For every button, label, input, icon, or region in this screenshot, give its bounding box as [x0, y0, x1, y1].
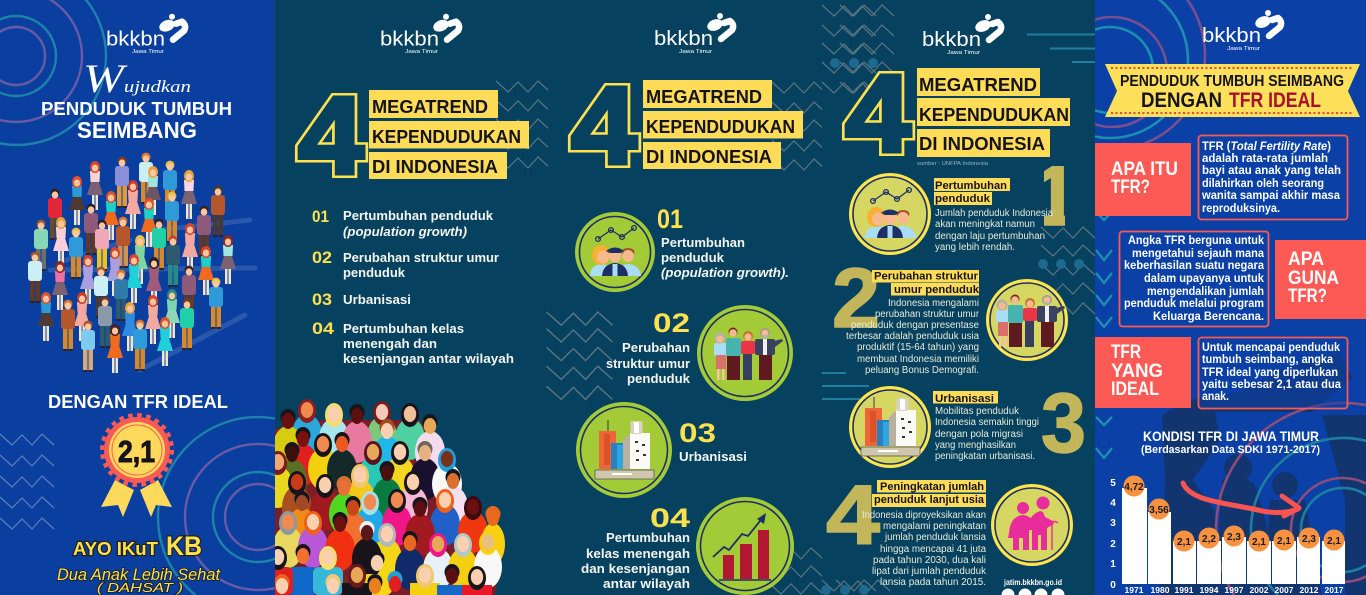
text box: kegunaan tfr: mengendalikan jumlah	[1147, 286, 1264, 298]
logo: bkkbn jawa timur	[380, 14, 459, 55]
item 1: pertumbuhan penduduk: penduduk	[935, 193, 991, 205]
decorative concentric circles	[0, 0, 275, 595]
item 1: pertumbuhan penduduk: Jumlah penduduk Indonesia	[935, 208, 1053, 219]
list of four megatrends: 02	[312, 248, 332, 267]
item 2: perubahan struktur umur penduduk: perubahan struktur umur	[875, 309, 980, 320]
item 04: pertumbuhan kelas menengah: 04	[650, 503, 690, 533]
logo: bkkbn jawa timur: bkkbn	[380, 28, 439, 51]
text box: kegunaan tfr: Angka TFR berguna untuk	[1128, 235, 1265, 247]
text box: definisi tfr: reproduksinya.	[1202, 203, 1280, 215]
item 02: perubahan struktur umur penduduk: Perubahan	[622, 341, 690, 355]
list of four megatrends: Urbanisasi	[343, 293, 411, 307]
list of four megatrends: Pertumbuhan kelas	[343, 322, 464, 336]
large numerals 1 2 3 4: 3	[1041, 376, 1086, 470]
item 01: pertumbuhan penduduk	[575, 204, 789, 292]
bar chart: tfr jawa timur 1971-2017: 2,1	[1327, 536, 1341, 547]
list of four megatrends: 01	[312, 207, 329, 226]
text box: tfr ideal: anak.	[1202, 391, 1229, 403]
crowd of diverse faces	[263, 399, 505, 595]
text box: definisi tfr: bayi atau anak yang telah	[1202, 165, 1341, 177]
bar chart: tfr jawa timur 1971-2017: 2007	[1275, 585, 1294, 595]
item 03: urbanisasi: 03	[679, 418, 716, 448]
label: tfr yang ideal: TFR	[1111, 342, 1141, 363]
item 04: pertumbuhan kelas menengah: dan kesenjangan	[581, 562, 690, 576]
slogan: dua anak lebih sehat: Dua Anak Lebih Sehat	[57, 565, 221, 584]
banner: penduduk tumbuh seimbang dengan tfr ideal	[1105, 64, 1360, 117]
item 4: peningkatan jumlah penduduk lanjut usia: penduduk lanjut usia	[874, 494, 985, 506]
bar chart: tfr jawa timur 1971-2017: 4,72	[1124, 482, 1144, 493]
text box: definisi tfr: TFR (Total Fertility Rate)	[1202, 141, 1331, 153]
item 4: peningkatan jumlah penduduk lanjut usia: lipat dari jumlah penduduk	[872, 566, 987, 577]
banner: penduduk tumbuh seimbang dengan tfr ideal: TFR IDEAL	[1229, 89, 1321, 112]
zigzag decoration	[547, 82, 826, 594]
panel 4: megatrend detail	[821, 0, 1095, 595]
banner: penduduk tumbuh seimbang dengan tfr ideal: PENDUDUK TUMBUH SEIMBANG	[1120, 73, 1344, 90]
item 2: perubahan struktur umur penduduk: penduduk dengan presentase	[851, 320, 979, 331]
heading: dengan tfr ideal: DENGAN TFR IDEAL	[48, 391, 228, 412]
bar chart: tfr jawa timur 1971-2017: 2,1	[1177, 537, 1191, 548]
item 2: perubahan struktur umur penduduk	[846, 270, 1068, 376]
item 04: pertumbuhan kelas menengah: Pertumbuhan	[606, 531, 690, 545]
title boxes: megatrend kependudukan di indonesia: MEGATREND	[646, 87, 762, 107]
item 1: pertumbuhan penduduk: akan meningkat namun	[935, 219, 1035, 230]
bar chart: tfr jawa timur 1971-2017: 1991	[1175, 585, 1194, 595]
bar chart: tfr jawa timur 1971-2017: 2,3	[1227, 532, 1241, 543]
zigzag decoration	[496, 81, 550, 168]
text box: tfr ideal	[1198, 338, 1348, 408]
bar chart: tfr jawa timur 1971-2017: 3	[1110, 518, 1116, 529]
panel 1: wujudkan penduduk tumbuh seimbang	[0, 0, 275, 595]
list of four megatrends: 04	[312, 319, 335, 338]
title boxes: megatrend kependudukan di indonesia: MEGATREND	[372, 97, 488, 117]
text box: tfr ideal: yaitu sebesar 2,1 atau dua	[1202, 379, 1342, 391]
big numeral 4: 4	[298, 74, 364, 198]
item 1: pertumbuhan penduduk: yang lebih rendah.	[935, 242, 1015, 253]
large numerals 1 2 3 4: 1	[1032, 149, 1079, 243]
decorative concentric circles	[1095, 0, 1366, 595]
item 04: pertumbuhan kelas menengah: kelas menengah	[586, 547, 690, 561]
logo: bkkbn jawa timur	[106, 14, 185, 55]
item 01: pertumbuhan penduduk: (population growth).	[661, 266, 789, 280]
slogan: dua anak lebih sehat	[57, 565, 221, 595]
label: apa guna tfr: APA	[1288, 249, 1324, 270]
heading: penduduk tumbuh seimbang: PENDUDUK TUMBUH	[41, 98, 232, 119]
item 1: pertumbuhan penduduk: Pertumbuhan	[935, 180, 1007, 192]
item 2: perubahan struktur umur penduduk: peluang Bonus Demografi.	[865, 365, 979, 376]
logo: bkkbn jawa timur: Jawa Timur	[132, 49, 164, 55]
heading: penduduk tumbuh seimbang	[41, 98, 232, 143]
bar chart: tfr jawa timur 1971-2017: 1	[1110, 559, 1116, 570]
label: apa guna tfr	[1275, 240, 1366, 319]
item 2: perubahan struktur umur penduduk: umur penduduk	[894, 284, 980, 296]
item 4: peningkatan jumlah penduduk lanjut usia: jumlah penduduk lansia	[884, 532, 986, 543]
text box: kegunaan tfr: dalam upayanya untuk	[1144, 273, 1265, 285]
bar chart: tfr jawa timur 1971-2017: 2,1	[1277, 536, 1291, 547]
call to action: ayo ikut kb: KB	[166, 531, 202, 561]
logo: bkkbn jawa timur: Jawa Timur	[679, 49, 712, 55]
silhouettes of people behind chart	[1160, 352, 1366, 595]
title boxes: megatrend kependudukan di indonesia	[369, 90, 529, 179]
item 01: pertumbuhan penduduk: Pertumbuhan	[661, 236, 745, 250]
label: apa guna tfr: GUNA	[1288, 268, 1339, 289]
list of four megatrends: 03	[312, 290, 332, 309]
big numeral 4: 4	[571, 64, 637, 188]
bar chart: tfr jawa timur 1971-2017: 5	[1110, 478, 1116, 489]
title boxes: megatrend kependudukan di indonesia: KEPENDUDUKAN	[372, 127, 521, 147]
zigzag decoration	[0, 434, 54, 529]
item 01: pertumbuhan penduduk: penduduk	[661, 251, 724, 265]
call to action: ayo ikut kb	[73, 531, 202, 561]
bar chart: tfr jawa timur 1971-2017: 2002	[1250, 585, 1269, 595]
item 3: urbanisasi: dengan pola migrasi	[935, 429, 1023, 440]
panel 3: 4 megatrend with icons	[547, 0, 826, 595]
item 1: pertumbuhan penduduk: dengan laju pertumbuhan	[935, 231, 1045, 242]
title boxes: megatrend kependudukan di indonesia: MEGATREND	[919, 75, 1037, 95]
list of four megatrends: kesenjangan antar wilayah	[343, 352, 514, 366]
item 02: perubahan struktur umur penduduk: penduduk	[627, 372, 690, 386]
item 4: peningkatan jumlah penduduk lanjut usia	[862, 480, 1073, 588]
item 4: peningkatan jumlah penduduk lanjut usia: Indonesia diproyeksikan akan	[862, 510, 986, 521]
bar chart: tfr jawa timur 1971-2017: 2012	[1300, 585, 1319, 595]
logo: bkkbn jawa timur: bkkbn	[922, 28, 981, 51]
panel 2: 4 megatrend list	[263, 0, 550, 595]
text box: definisi tfr: wanita sampai akhir masa	[1201, 190, 1341, 202]
item 2: perubahan struktur umur penduduk: produktif (15-64 tahun) yang	[857, 342, 979, 353]
text box: kegunaan tfr: Keluarga Berencana.	[1153, 311, 1264, 323]
item 03: urbanisasi	[576, 402, 747, 498]
heading: penduduk tumbuh seimbang: SEIMBANG	[77, 117, 197, 143]
item 04: pertumbuhan kelas menengah	[581, 497, 794, 595]
text box: tfr ideal: Untuk mencapai penduduk	[1202, 342, 1341, 354]
badge: 2,1 rosette	[101, 415, 172, 517]
item 2: perubahan struktur umur penduduk: Perubahan struktur	[874, 270, 979, 282]
bar chart: tfr jawa timur 1971-2017: 1980	[1151, 585, 1170, 595]
call to action: ayo ikut kb: AYO IKuT	[73, 539, 158, 559]
item 2: perubahan struktur umur penduduk: terbesar adalah penduduk usia	[846, 331, 979, 342]
bar chart: tfr jawa timur 1971-2017: 2,1	[1252, 537, 1266, 548]
text box: kegunaan tfr: penduduk melalui program	[1124, 298, 1264, 310]
item 4: peningkatan jumlah penduduk lanjut usia: mengalami peningkatan	[883, 521, 986, 532]
bar chart: tfr jawa timur 1971-2017: 4	[1110, 498, 1116, 509]
bar chart: tfr jawa timur 1971-2017: 0	[1110, 580, 1116, 591]
item 02: perubahan struktur umur penduduk	[606, 305, 793, 401]
chart title: kondisi tfr di jawa timur	[1142, 432, 1320, 456]
text box: definisi tfr: dilahirkan oleh seorang	[1202, 178, 1324, 190]
slogan: dua anak lebih sehat: ( DAHSAT )	[97, 580, 183, 595]
website and social icons: jatim.bkkbn.go.id	[1003, 578, 1062, 587]
bar chart: tfr jawa timur 1971-2017: 1997	[1225, 585, 1244, 595]
list of four megatrends: Perubahan struktur umur	[343, 251, 499, 265]
item 4: peningkatan jumlah penduduk lanjut usia: hingga mencapai 41 juta	[880, 544, 986, 555]
website and social icons	[1002, 578, 1064, 595]
label: apa guna tfr: TFR?	[1288, 286, 1327, 307]
item 04: pertumbuhan kelas menengah: antar wilayah	[603, 577, 690, 591]
item 3: urbanisasi: Urbanisasi	[935, 393, 994, 405]
text box: tfr ideal: tumbuh seimbang, angka	[1202, 354, 1334, 366]
label: tfr yang ideal: YANG	[1111, 361, 1163, 382]
big numeral 4: 4	[845, 52, 911, 176]
item 02: perubahan struktur umur penduduk: struktur umur	[606, 357, 690, 371]
label: apa itu tfr	[1095, 143, 1191, 216]
item 1: pertumbuhan penduduk	[849, 173, 1053, 255]
title boxes: megatrend kependudukan di indonesia: KEPENDUDUKAN	[646, 117, 795, 137]
label: apa itu tfr: TFR?	[1111, 177, 1150, 198]
chart title: kondisi tfr di jawa timur: (Berdasarkan Data SDKI 1971-2017)	[1141, 444, 1320, 456]
bar chart: tfr jawa timur 1971-2017: 3,56	[1149, 505, 1169, 516]
chevron decoration	[1096, 212, 1112, 458]
text box: kegunaan tfr	[1120, 232, 1268, 326]
item 4: peningkatan jumlah penduduk lanjut usia: lansia pada tahun 2015.	[880, 577, 986, 588]
text box: kegunaan tfr: keberhasilan suatu negara	[1124, 260, 1265, 272]
logo: bkkbn jawa timur: bkkbn	[654, 27, 713, 50]
text box: definisi tfr	[1198, 136, 1348, 220]
list of four megatrends: Pertumbuhan penduduk	[343, 209, 493, 223]
item 3: urbanisasi: yang menghasilkan	[935, 440, 1016, 451]
zigzag, dot and line decoration	[821, 5, 1095, 595]
label: apa itu tfr: APA ITU	[1111, 159, 1178, 180]
title boxes: megatrend kependudukan di indonesia	[643, 80, 803, 169]
text box: tfr ideal: TFR ideal yang diperlukan	[1202, 367, 1338, 379]
big numeral 4: 4	[571, 64, 637, 188]
big numeral 4: 4	[298, 74, 364, 198]
label: tfr yang ideal	[1095, 337, 1191, 408]
item 02: perubahan struktur umur penduduk: 02	[653, 308, 690, 338]
item 3: urbanisasi: peningkatan urbanisasi.	[935, 451, 1035, 462]
script heading: wujudkan: W ujudkan	[83, 56, 191, 101]
title boxes: megatrend kependudukan di indonesia: KEPENDUDUKAN	[919, 105, 1069, 125]
logo: bkkbn jawa timur: Jawa Timur	[405, 49, 438, 55]
title boxes: megatrend kependudukan di indonesia: DI INDONESIA	[372, 157, 498, 177]
title boxes: megatrend kependudukan di indonesia	[917, 68, 1070, 157]
chart title: kondisi tfr di jawa timur: KONDISI TFR DI JAWA TIMUR	[1143, 428, 1319, 444]
logo: bkkbn jawa timur: bkkbn	[106, 28, 165, 51]
bar chart: tfr jawa timur 1971-2017: 1971	[1125, 585, 1144, 595]
item 2: perubahan struktur umur penduduk: membuat Indonesia memiliki	[857, 354, 979, 365]
bar chart: tfr jawa timur 1971-2017: 2,2	[1202, 534, 1216, 545]
item 03: urbanisasi: Urbanisasi	[679, 450, 747, 464]
item 4: peningkatan jumlah penduduk lanjut usia: Peningkatan jumlah	[880, 481, 984, 493]
logo: bkkbn jawa timur: Jawa Timur	[947, 50, 980, 56]
large numerals 1 2 3 4: 2	[832, 251, 880, 345]
logo: bkkbn jawa timur	[654, 13, 733, 55]
label: tfr yang ideal: IDEAL	[1111, 379, 1159, 400]
item 2: perubahan struktur umur penduduk: Indonesia mengalami	[888, 298, 979, 309]
bar chart: tfr jawa timur 1971-2017	[1110, 476, 1345, 595]
text box: definisi tfr: adalah rata-rata jumlah	[1202, 153, 1328, 165]
list of four megatrends: (population growth)	[343, 225, 467, 239]
badge: 2,1 rosette: 2,1	[118, 434, 155, 469]
panel 5: tfr ideal explanation	[1095, 0, 1366, 595]
streaks behind crowd	[50, 220, 255, 370]
logo: bkkbn jawa timur: bkkbn	[1202, 24, 1261, 47]
item 3: urbanisasi: Indonesia semakin tinggi	[935, 417, 1039, 428]
title boxes: megatrend kependudukan di indonesia: DI INDONESIA	[919, 134, 1045, 154]
crowd illustration	[28, 153, 236, 373]
bar chart: tfr jawa timur 1971-2017: 2,3	[1302, 534, 1316, 545]
bar chart: tfr jawa timur 1971-2017: 2	[1110, 539, 1116, 550]
bar chart: tfr jawa timur 1971-2017: 2017	[1325, 585, 1344, 595]
list of four megatrends: menengah dan	[343, 337, 437, 351]
item 4: peningkatan jumlah penduduk lanjut usia: pada tahun 2030, dua kali	[873, 555, 986, 566]
banner: penduduk tumbuh seimbang dengan tfr ideal: DENGAN	[1141, 89, 1222, 112]
source note: sumber : UNFPA Indonesia	[917, 161, 989, 167]
item 01: pertumbuhan penduduk: 01	[657, 204, 683, 234]
logo: bkkbn jawa timur: Jawa Timur	[1227, 46, 1260, 52]
list of four megatrends	[312, 207, 514, 366]
large numerals 1 2 3 4	[826, 149, 1086, 562]
logo: bkkbn jawa timur	[922, 14, 1001, 56]
item 3: urbanisasi: Mobilitas penduduk	[935, 406, 1020, 417]
logo: bkkbn jawa timur	[1202, 10, 1281, 52]
large numerals 1 2 3 4: 4	[826, 468, 880, 562]
item 3: urbanisasi	[849, 386, 1039, 468]
bar chart: tfr jawa timur 1971-2017: 1994	[1200, 585, 1219, 595]
text box: kegunaan tfr: mengetahui sejauh mana	[1132, 248, 1265, 260]
list of four megatrends: penduduk	[343, 266, 405, 280]
title boxes: megatrend kependudukan di indonesia: DI INDONESIA	[646, 147, 772, 167]
big numeral 4: 4	[845, 52, 911, 176]
arrow: trend downward	[1183, 483, 1299, 516]
